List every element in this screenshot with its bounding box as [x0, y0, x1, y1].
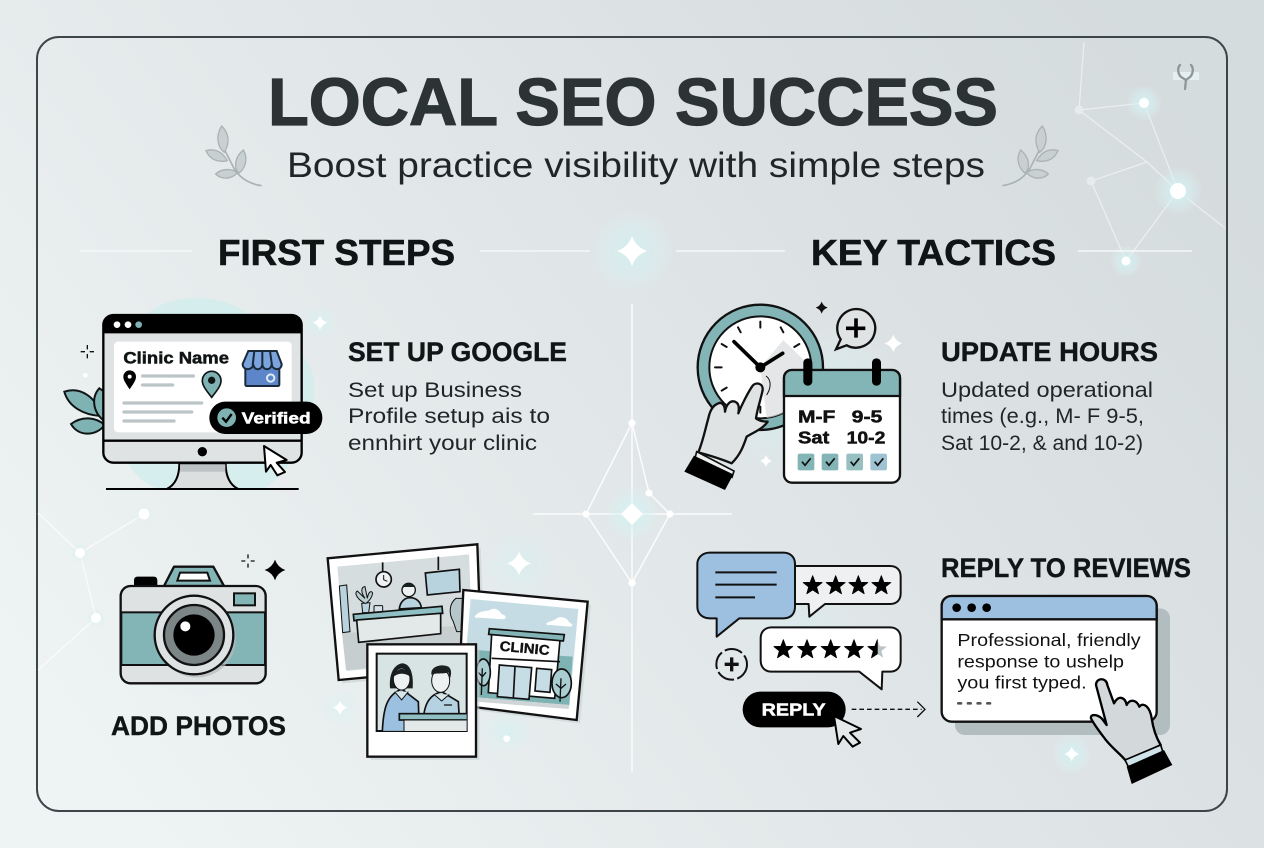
photo: clinic exterior: CLINIC	[499, 638, 550, 658]
body: ennhirt your clinic	[348, 431, 537, 455]
bubble: four stars	[795, 566, 901, 617]
reply button	[743, 692, 846, 727]
background blob	[112, 298, 314, 490]
calendar hours text: Sat	[798, 427, 830, 447]
clinic name: Clinic Name	[123, 348, 229, 367]
heading: first steps: FIRST STEPS	[218, 232, 455, 273]
title: LOCAL SEO SUCCESS	[268, 65, 998, 140]
body	[348, 378, 550, 455]
calendar check boxes	[798, 454, 887, 470]
body: times (e.g., M- F 9-5,	[941, 404, 1144, 428]
photo: clinic exterior	[458, 590, 591, 723]
sparkles	[302, 304, 338, 341]
calendar hours text	[798, 406, 885, 447]
body: Set up Business	[348, 378, 522, 402]
calendar hours text: M-F	[798, 406, 835, 426]
response text: you first typed.	[957, 673, 1087, 693]
icon: plus bubble	[836, 309, 875, 349]
illustration: review bubbles	[697, 553, 925, 747]
body: Sat 10-2, & and 10-2)	[941, 431, 1143, 455]
desk	[353, 606, 443, 621]
wall clock	[383, 557, 438, 572]
response text: response to ushelp	[957, 651, 1124, 671]
sparkles	[265, 560, 285, 580]
illustration: review bubbles: REPLY	[762, 700, 826, 720]
icon: teal pin	[202, 371, 221, 397]
verified badge	[209, 402, 322, 434]
heading: SET UP GOOGLE	[348, 337, 567, 367]
bubble: blue message	[697, 553, 795, 637]
body: Updated operational	[941, 378, 1153, 402]
center vertical divider with diamond network	[533, 304, 732, 772]
monitor body	[103, 315, 302, 463]
window shadow	[955, 608, 1170, 735]
dashed arrow	[852, 702, 925, 717]
icon: google storefront	[243, 351, 282, 386]
clock hands	[734, 342, 783, 367]
icon: laurel left	[206, 126, 262, 186]
calendar hours text: 9-5	[852, 406, 883, 426]
heading: add photos: ADD PHOTOS	[111, 711, 286, 741]
photo: staff polaroid	[367, 644, 479, 760]
icon: stethoscope	[1173, 65, 1199, 89]
calendar	[784, 370, 900, 483]
window	[942, 596, 1157, 722]
sparkles	[816, 302, 828, 314]
body	[941, 378, 1153, 455]
man	[423, 692, 460, 713]
illustration: camera	[113, 554, 285, 700]
receptionist	[399, 598, 421, 609]
wall screen	[425, 569, 460, 595]
lens	[157, 599, 236, 678]
glow star	[1051, 733, 1092, 775]
illustration: photo collage	[320, 525, 591, 760]
illustration: clock and calendar	[684, 302, 903, 490]
clock	[698, 305, 823, 430]
screen card	[114, 342, 292, 432]
building	[488, 634, 560, 698]
plant	[362, 603, 370, 613]
photo: reception	[328, 544, 485, 683]
subtitle: Boost practice visibility with simple steps	[287, 146, 985, 185]
response text: Professional, friendly	[957, 630, 1141, 650]
illustration: monitor with verified business listing: Verified	[242, 410, 311, 427]
calendar hours text: 10-2	[847, 427, 885, 447]
woman	[390, 663, 413, 688]
text block: set up google	[348, 337, 567, 455]
constellation: left	[38, 503, 155, 670]
trees	[476, 659, 571, 698]
body: Profile setup ais to	[348, 404, 550, 428]
icon: cursor	[834, 716, 861, 747]
divider: section heading rules and star	[80, 207, 1192, 295]
heading: UPDATE HOURS	[941, 337, 1158, 367]
illustration: monitor with verified business listing	[64, 298, 338, 490]
constellation: top right	[1074, 42, 1225, 277]
icon: pointing hand	[698, 384, 768, 463]
icon: leaves	[64, 388, 107, 434]
icon: pointing hand	[1091, 679, 1161, 762]
icon: laurel right	[1002, 126, 1058, 186]
text block: update hours	[941, 337, 1158, 455]
desk	[399, 714, 468, 720]
icon: plus circle	[716, 649, 747, 680]
heading: key tactics: KEY TACTICS	[811, 232, 1056, 273]
monitor stand	[167, 463, 238, 489]
sparkles	[507, 551, 531, 575]
illustration: response window	[942, 596, 1172, 784]
icon: cursor	[264, 446, 287, 475]
response text	[957, 630, 1141, 693]
bubble: four and a half stars	[761, 627, 901, 689]
icon: black pin	[123, 370, 136, 389]
heading: reply to reviews: REPLY TO REVIEWS	[941, 553, 1191, 583]
